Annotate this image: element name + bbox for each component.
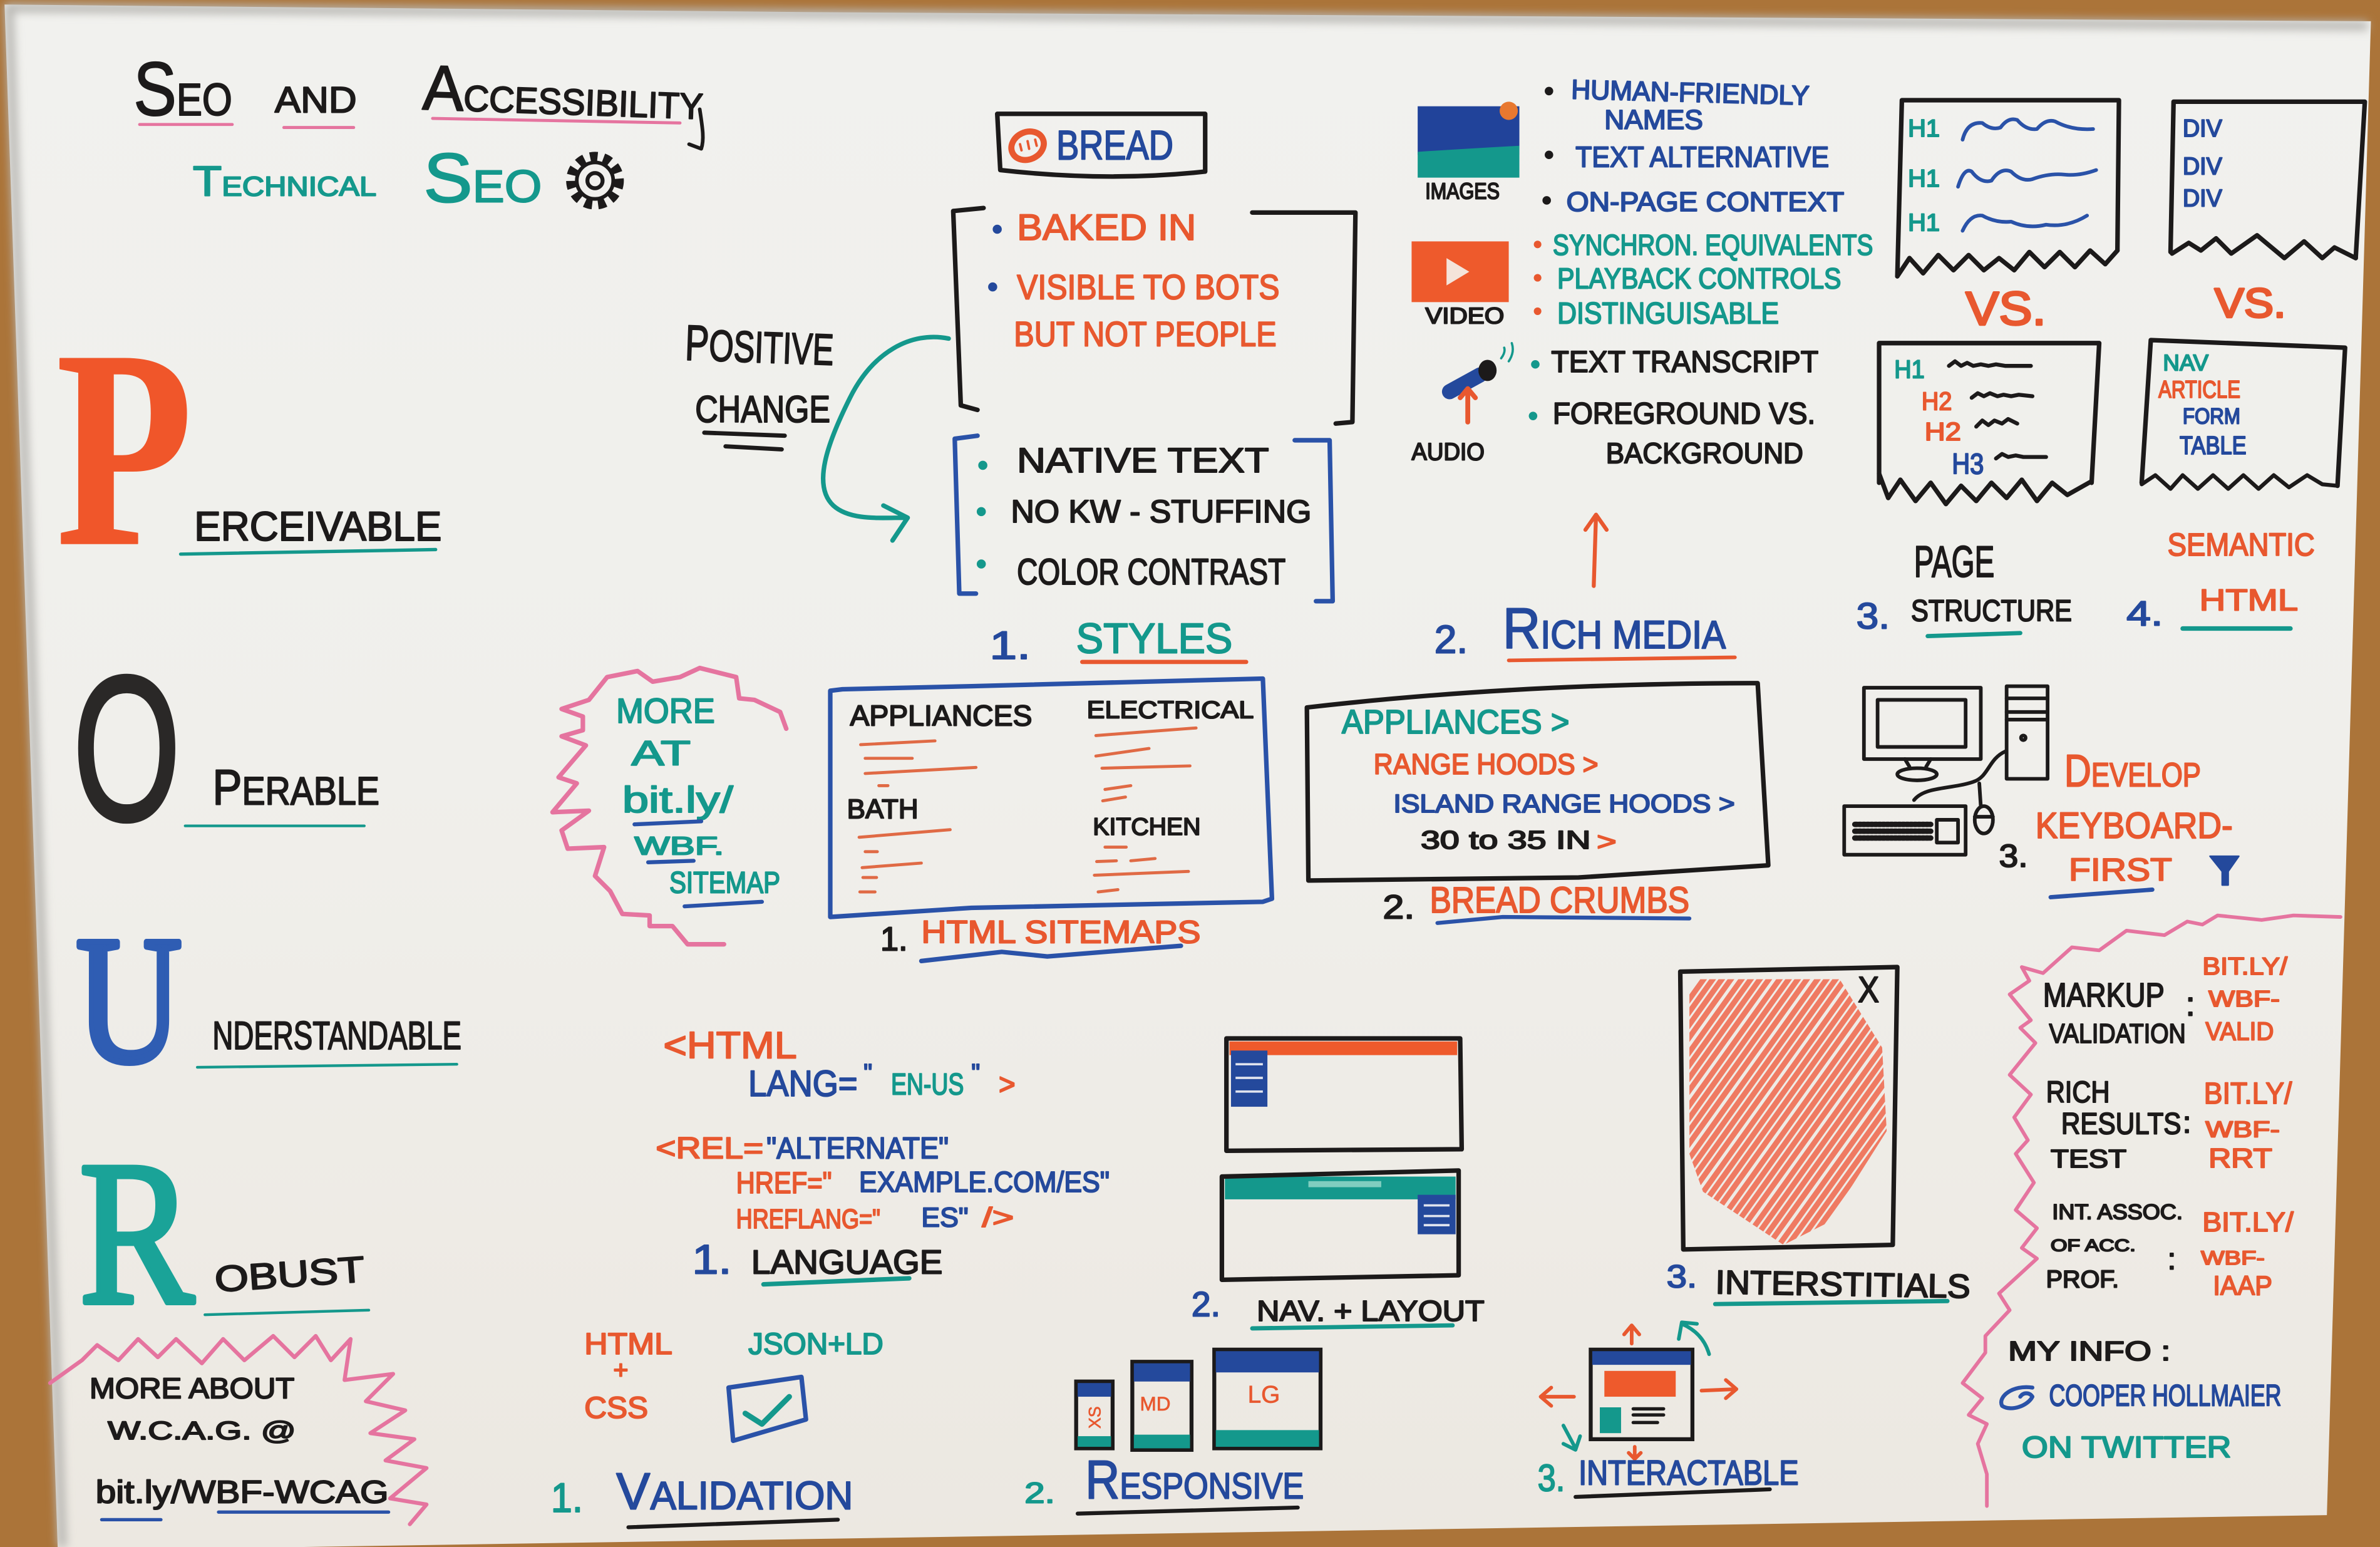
icon: bread [1007,127,1049,165]
panel: rich media: VIDEO [1425,303,1504,328]
panel: tools and contact info: WBF- [2201,1246,2265,1269]
heading: 2. Nav + Layout: NAV. + LAYOUT [1257,1295,1485,1327]
heading: 2. Breadcrumbs: 2. [1383,889,1414,926]
panel: breadcrumbs: RANGE HOODS > [1374,748,1599,780]
icon: validation checkbox [729,1377,806,1441]
text: JSON+LD: JSON+LD [748,1327,883,1361]
panel: tools and contact info [1962,916,2341,1506]
title: SEO and Accessibility [133,46,704,149]
page structure: semantic elements: TABLE [2180,431,2247,460]
wireframe: interstitial popup [1678,965,1900,1251]
cloud callout: more at bit.ly/wbf-sitemap: MORE [616,691,715,730]
heading: 1. Validation [551,1462,853,1527]
wireframe: right nav layout [1222,1171,1459,1280]
page structure: semantic elements: NAV [2163,349,2209,375]
code block: language tags: "ALTERNATE" [766,1131,949,1165]
panel: rich media: BACKGROUND [1606,437,1803,469]
title: SEO and Accessibility: AND [275,80,357,120]
panel: HTML sitemap [830,679,1272,917]
panel: rich media: AUDIO [1411,438,1485,465]
icon: microphone [1450,343,1513,422]
panel: tools and contact info: RRT [2208,1144,2272,1174]
panel: tools and contact info: MY INFO : [2008,1337,2170,1367]
page structure comparison: divs: DIV [2183,153,2222,180]
page structure comparison: flat headings: H1 [1908,165,1940,192]
panel: tools and contact info: : [2186,986,2195,1023]
wireframe: interstitial popup: X [1858,970,1879,1010]
cloud callout: more at bit.ly/wbf-sitemap: SITEMAP [669,866,780,899]
heading: 1. HTML Sitemaps [880,914,1200,961]
panel: rich media [1411,75,1873,469]
code block: language tags: " [971,1060,980,1087]
code block: language tags: EN-US [891,1068,964,1102]
panel: rich media: TEXT TRANSCRIPT [1551,345,1818,379]
page structure: nested headings: H2 [1925,417,1961,446]
text: positive change: POSITIVE [684,315,835,376]
heading: 1. Validation: 1. [551,1475,583,1521]
letter R: Robust: OBUST [214,1249,366,1300]
callout: more about WCAG: MORE ABOUT [90,1372,294,1404]
heading: 3. Develop Keyboard-First: 3. [1999,838,2028,874]
letter R: Robust [79,1119,369,1348]
subtitle: Technical SEO [193,138,542,217]
icon: image [1418,101,1520,178]
bread box [997,114,1205,177]
panel: tools and contact info: BIT.LY/ [2202,953,2287,980]
heading: 3. Interactable [1538,1454,1799,1499]
code block: language tags: EXAMPLE.COM/ES" [859,1166,1110,1198]
heading: 1. HTML Sitemaps: 1. [880,921,908,958]
panel: rich media: PLAYBACK CONTROLS [1557,262,1841,295]
page structure: semantic elements: FORM [2183,404,2240,428]
panel: tools and contact info: VALID [2205,1017,2274,1045]
cloud callout: more at bit.ly/wbf-sitemap: AT [631,734,691,773]
panel: breadcrumbs [1307,683,1768,881]
heading: 1. Language: 1. [692,1237,731,1283]
code block: language tags: /> [982,1203,1014,1233]
page structure: semantic elements [2141,340,2345,489]
text: HTML + CSS [584,1327,672,1425]
icon: responsive devices [1076,1350,1321,1450]
text: HTML + CSS: + [613,1355,628,1384]
device: small [1076,1382,1113,1448]
page structure: nested headings: H1 [1894,355,1925,384]
letter P: Perceivable: P [56,292,193,605]
panel: rich media: NAMES [1604,105,1703,135]
heading: 1. Language: LANGUAGE [751,1244,942,1281]
panel: good styles list: NO KW - STUFFING [1011,494,1311,529]
heading: 3. Develop Keyboard-First: DEVELOP [2064,746,2201,797]
code block: language tags: HREFLANG=" [736,1204,880,1234]
code block: language tags [656,1023,1110,1234]
panel: tools and contact info: VALIDATION [2049,1019,2186,1049]
heading: 3. Page Structure: 3. [1857,596,1890,637]
panel: tools and contact info: : [2168,1242,2176,1276]
device: large [1214,1350,1321,1448]
heading: 2. Responsive: RESPONSIVE [1085,1449,1304,1510]
heading: 4. Semantic HTML [2126,527,2315,633]
cloud callout: more at bit.ly/wbf-sitemap: WBF. [634,832,724,861]
page structure: nested headings: H3 [1952,447,1984,480]
icon: video [1411,241,1509,302]
code block: language tags: " [863,1060,872,1087]
code block: language tags: HREF=" [736,1166,832,1200]
panel: tools and contact info: BIT.LY/ [2202,1208,2294,1238]
heading: 2. Nav + Layout [1192,1285,1485,1328]
letter P: Perceivable [56,292,441,605]
heading: 3. Interstitials: INTERSTITIALS [1715,1264,1970,1305]
callout: more about WCAG: bit.ly/WBF-WCAG [96,1474,389,1510]
panel: rich media: HUMAN-FRIENDLY [1571,75,1810,111]
heading: 2. Rich Media: RICH MEDIA [1503,596,1726,661]
heading: 3. Develop Keyboard-First [1999,746,2239,898]
page structure comparison: divs: DIV [2183,115,2222,142]
text: positive change: CHANGE [695,388,830,430]
device: medium: MD [1140,1392,1171,1415]
heading: 3. Develop Keyboard-First: FIRST [2069,852,2172,887]
letter U: Understandable: NDERSTANDABLE [212,1014,461,1058]
panel: HTML sitemap: KITCHEN [1093,814,1200,841]
heading: 3. Interstitials: 3. [1667,1259,1697,1295]
cloud callout: more at bit.ly/wbf-sitemap: bit.ly/ [622,780,734,820]
letter O: Operable: PERABLE [212,760,379,815]
code block: language tags: ES" [921,1203,969,1233]
heading: 1. HTML Sitemaps: HTML SITEMAPS [921,914,1200,949]
panel: bad styles list [953,207,1356,423]
heading: 2. Nav + Layout: 2. [1192,1285,1220,1324]
panel: tools and contact info: COOPER HOLLMAIER [2049,1379,2281,1413]
panel: tools and contact info: RICH [2046,1075,2110,1109]
icon: at sign [2001,1387,2032,1408]
cloud callout: more at bit.ly/wbf-sitemap [552,668,786,944]
letter O: Operable: O [73,633,180,864]
panel: tools and contact info: MARKUP [2043,977,2165,1014]
page structure comparison: flat headings: H1 [1908,209,1940,236]
panel: good styles list: COLOR CONTRAST [1017,552,1285,592]
panel: good styles list: NATIVE TEXT [1017,441,1269,480]
text: positive change [684,315,835,449]
heading: 1. Validation: VALIDATION [616,1462,853,1520]
heading: 3. Page Structure: STRUCTURE [1911,594,2072,628]
heading: 2. Responsive: 2. [1024,1477,1055,1509]
page structure comparison: divs: DIV [2183,185,2222,212]
page structure: semantic elements: ARTICLE [2158,376,2240,403]
panel: bad styles list: BUT NOT PEOPLE [1014,315,1277,354]
panel: breadcrumbs: > [1597,827,1617,856]
panel: tools and contact info: INT. ASSOC. [2052,1200,2183,1224]
panel: breadcrumbs: 30 to 35 IN [1421,825,1590,854]
arrow: positive change curve [823,337,949,541]
title: SEO and Accessibility: ACCESSIBILITY [421,52,704,133]
code block: language tags: <HTML [663,1023,797,1066]
icon: interactable page with arrows [1540,1322,1736,1459]
panel: bad styles list: VISIBLE TO BOTS [1017,268,1280,307]
panel: tools and contact info: TEST [2051,1144,2126,1173]
panel: rich media: SYNCHRON. EQUIVALENTS [1553,229,1873,261]
text: HTML + CSS: HTML [584,1327,672,1361]
subtitle: Technical SEO: SEO [423,138,542,217]
panel: tools and contact info: PROF. [2046,1266,2119,1293]
heading: 1. Styles: 1. [990,624,1031,668]
letter P: Perceivable: ERCEIVABLE [194,504,441,549]
bread box: BREAD [1056,123,1173,168]
panel: tools and contact info: RESULTS [2061,1107,2181,1141]
page structure comparison: flat headings: H1 [1908,115,1940,142]
callout: more about WCAG: W.C.A.G. @ [108,1416,296,1445]
callout: more about WCAG [50,1336,426,1524]
heading: 2. Rich Media: 2. [1435,618,1468,661]
label: VS left: VS. [1965,282,2046,335]
letter U: Understandable [76,899,461,1100]
heading: 4. Semantic HTML: HTML [2200,583,2298,617]
heading: 1. Language [692,1237,942,1285]
panel: tools and contact info: BIT.LY/ [2204,1077,2292,1110]
letter U: Understandable: U [76,899,182,1100]
device: large: LG [1248,1382,1280,1409]
heading: 1. Styles: STYLES [1076,615,1232,662]
heading: 3. Develop Keyboard-First: KEYBOARD- [2036,805,2233,846]
panel: HTML sitemap: ELECTRICAL [1087,697,1254,724]
panel: breadcrumbs: ISLAND RANGE HOODS > [1393,789,1735,818]
heading: 4. Semantic HTML: SEMANTIC [2168,527,2315,562]
page structure: nested headings [1879,343,2099,504]
panel: rich media: FOREGROUND VS. [1553,396,1815,430]
heading: 3. Page Structure [1857,537,2072,637]
letter R: Robust: R [79,1119,195,1348]
code block: language tags: > [999,1068,1016,1102]
panel: breadcrumbs: APPLIANCES > [1342,704,1570,741]
device: small: XS [1085,1406,1104,1429]
panel: rich media: DISTINGUISABLE [1557,296,1779,330]
panel: rich media: ON-PAGE CONTEXT [1567,187,1844,217]
panel: tools and contact info: WBF- [2208,986,2280,1011]
heading: 4. Semantic HTML: 4. [2126,594,2163,633]
wireframe: left nav layout [1227,1038,1461,1151]
panel: tools and contact info: IAAP [2213,1271,2272,1301]
heading: 3. Interactable: 3. [1538,1456,1565,1499]
page structure: nested headings: H2 [1922,386,1952,415]
page structure comparison: divs [2170,101,2365,258]
code block: language tags: <REL= [656,1131,763,1165]
heading: 1. Styles [990,615,1246,668]
heading: 2. Breadcrumbs: BREAD CRUMBS [1430,880,1689,921]
heading: 2. Responsive [1024,1449,1304,1514]
arrow: up to rich media [1585,515,1607,586]
heading: 3. Interactable: INTERACTABLE [1579,1454,1799,1493]
text: HTML + CSS: CSS [584,1391,648,1425]
heading: 3. Page Structure: PAGE [1914,537,1994,586]
panel: good styles list [955,436,1332,601]
panel: tools and contact info: : [2183,1105,2191,1139]
label: VS right: VS. [2215,281,2286,326]
icon: desktop computer [1844,686,2048,855]
code block: language tags: LANG= [748,1063,858,1104]
panel: HTML sitemap: BATH [847,795,919,825]
page structure comparison: flat headings [1897,100,2119,276]
panel: HTML sitemap: APPLIANCES [850,700,1032,732]
title: SEO and Accessibility: SEO [133,46,232,132]
panel: rich media: TEXT ALTERNATIVE [1575,141,1829,173]
panel: tools and contact info: OF ACC. [2051,1236,2136,1255]
letter O: Operable [73,633,379,864]
icon: funnel [2210,856,2239,885]
panel: tools and contact info: WBF- [2205,1117,2280,1142]
panel: bad styles list: BAKED IN [1017,207,1196,248]
panel: tools and contact info: ON TWITTER [2022,1431,2231,1464]
panel: rich media: IMAGES [1425,178,1500,204]
heading: 2. Breadcrumbs [1383,880,1689,926]
subtitle: Technical SEO: T ECHNICAL [193,158,376,205]
device: medium [1132,1362,1192,1450]
icon: gear [570,157,619,205]
